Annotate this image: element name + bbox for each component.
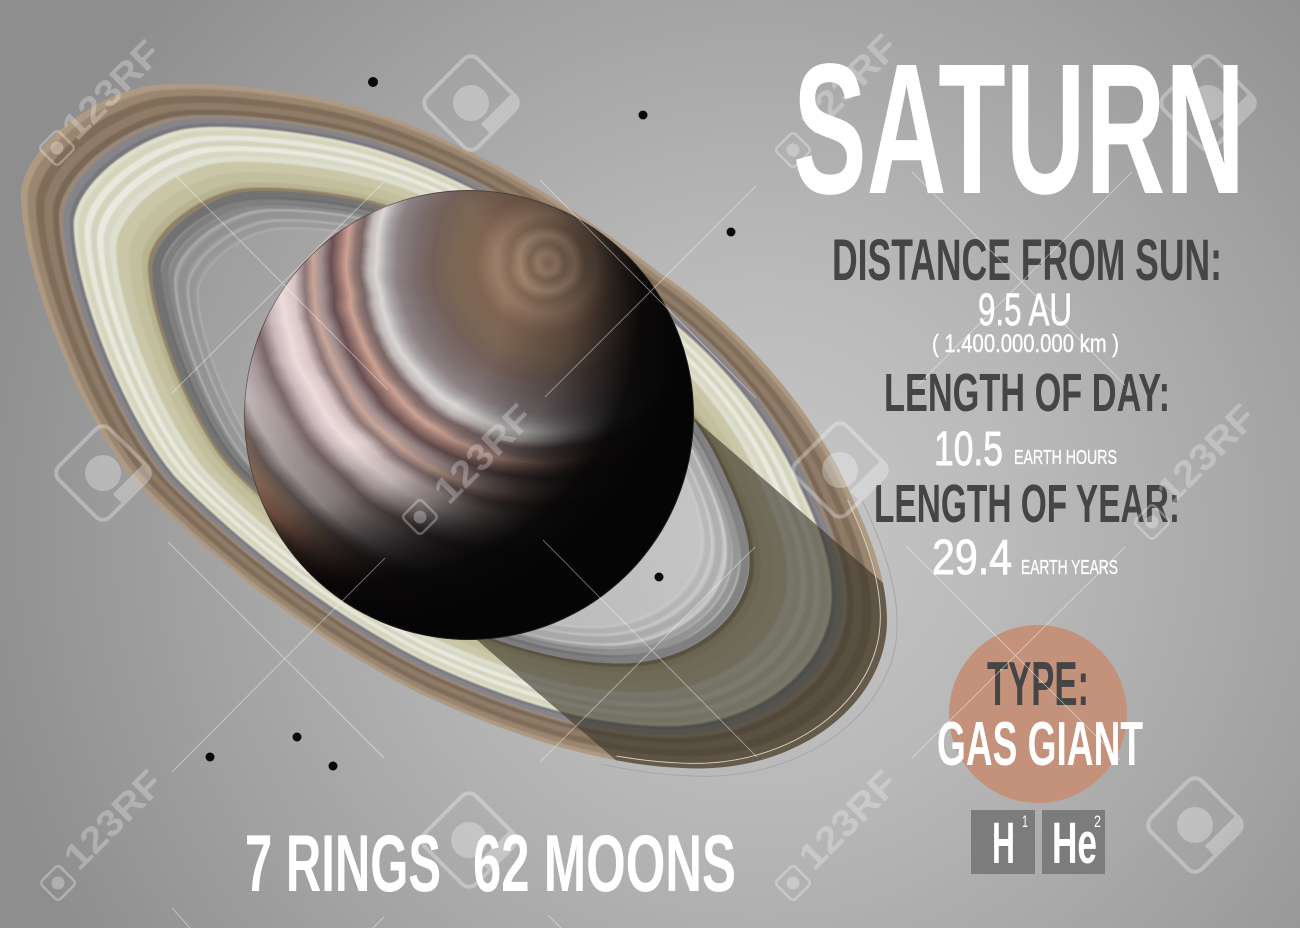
year unit: EARTH YEARS xyxy=(1021,557,1118,579)
element: helium: He xyxy=(1052,811,1097,876)
day value: 10.5 xyxy=(934,423,1003,476)
moons xyxy=(206,77,736,770)
rings count: 7 RINGS xyxy=(245,819,441,909)
type label: TYPE: xyxy=(987,650,1089,719)
element: helium: 2 xyxy=(1094,812,1101,831)
distance value: 9.5 AU xyxy=(978,284,1072,335)
element: hydrogen: H xyxy=(992,811,1015,876)
type circle xyxy=(949,625,1127,803)
watermark text: 123RF xyxy=(791,26,906,142)
main ring bands and planet shadow xyxy=(21,84,887,768)
element: helium xyxy=(1042,810,1105,876)
distance from sun xyxy=(832,228,1222,358)
watermark text: 123RF xyxy=(791,762,906,878)
moons count: 62 MOONS xyxy=(473,819,736,909)
element: hydrogen: 1 xyxy=(1022,812,1028,831)
year value: 29.4 xyxy=(932,531,1012,585)
gas giant label: GAS GIANT xyxy=(937,710,1143,779)
crosshair lines xyxy=(168,172,1132,928)
planet shadow on rings xyxy=(477,418,887,768)
watermark text: 123RF xyxy=(426,396,541,512)
watermark text: 123RF xyxy=(54,32,169,148)
watermark text: 123RF xyxy=(1149,396,1264,512)
saturn planet xyxy=(234,180,704,650)
element: hydrogen xyxy=(971,810,1035,876)
watermark text: 123RF xyxy=(56,762,171,878)
distance in km: ( 1.400.000.000 km ) xyxy=(932,330,1119,358)
thin orbit lines xyxy=(601,500,898,777)
day unit: EARTH HOURS xyxy=(1014,447,1117,469)
saturn rings xyxy=(21,84,898,777)
inner translucent rings xyxy=(156,194,745,660)
length of year xyxy=(874,474,1180,585)
length of day xyxy=(884,363,1170,476)
